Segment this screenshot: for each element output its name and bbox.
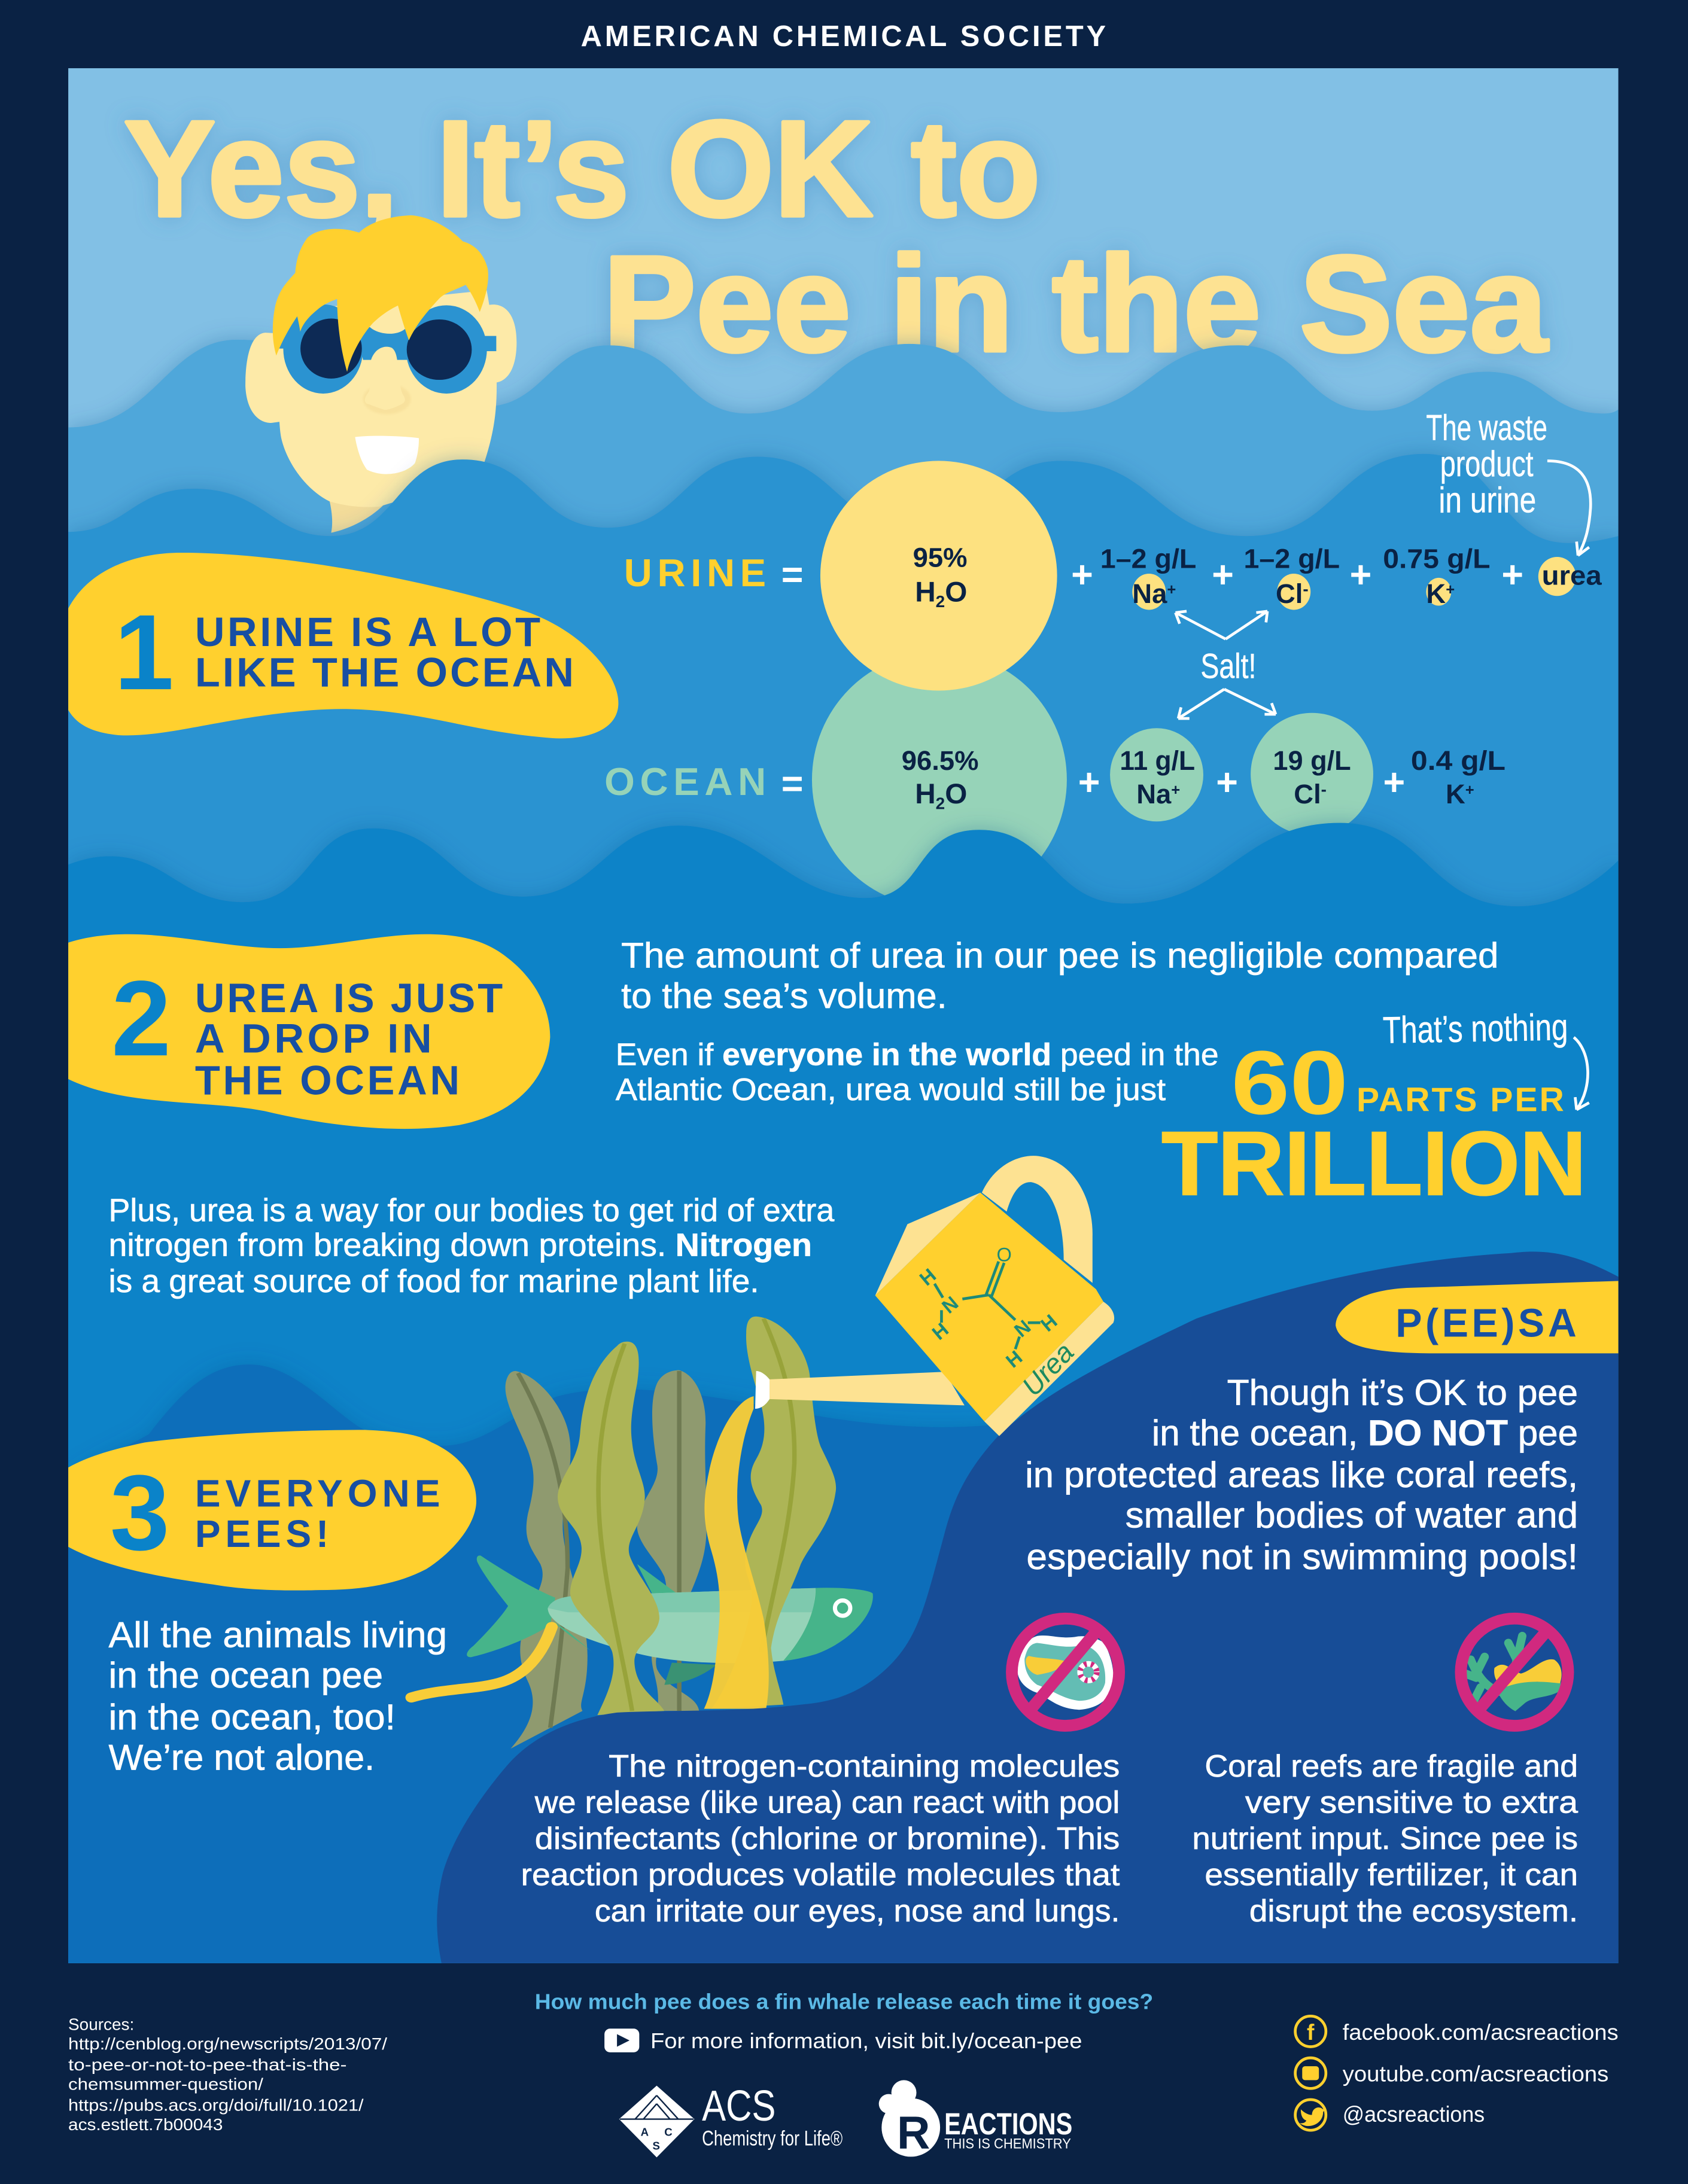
text: coral reefs: very sensitive to extra <box>1245 1785 1578 1820</box>
stat: 60 parts per trillion: 60 <box>1231 1032 1348 1134</box>
glasses <box>279 304 496 394</box>
logo: Reactions <box>879 2080 1072 2158</box>
annotation: the waste product in urine: product <box>1440 443 1534 484</box>
text: do not pee in protected areas: smaller bodies of water and <box>1126 1494 1578 1535</box>
urine composition text: 2 <box>936 592 945 611</box>
text: nitrogen food for marine life <box>109 1193 834 1299</box>
text: everyone in the world: Atlantic Ocean, urea would still be just <box>616 1073 1166 1107</box>
ocean composition text: 19 g/L <box>1273 745 1351 776</box>
panel: dark blue P(EE)SA area <box>437 1251 1619 1963</box>
text: pool chemistry: disinfectants (chlorine or bromine). This <box>535 1821 1120 1856</box>
heading 3: EVERYONE <box>195 1472 440 1515</box>
text: coral reefs: Coral reefs are fragile and <box>1205 1749 1578 1784</box>
youtube <box>1295 2058 1608 2088</box>
text: urea negligible <box>621 936 1498 1016</box>
text: pool chemistry: we release (like urea) can react with pool <box>534 1785 1120 1820</box>
numeral 2: 2 <box>111 958 171 1078</box>
urine composition text: 0.75 g/L <box>1383 544 1490 574</box>
annotation: the waste product in urine: in urine <box>1438 480 1536 520</box>
ocean composition text: O <box>945 778 967 810</box>
ocean composition text: Cl <box>1294 779 1321 809</box>
arrows to ocean ions <box>1178 689 1276 718</box>
facebook: f <box>1307 2019 1315 2045</box>
text: coral reefs: essentially fertilizer, it can <box>1205 1858 1578 1893</box>
tooth <box>355 436 419 474</box>
ACS diamond: S <box>652 2140 660 2152</box>
ocean composition text: H <box>915 778 936 810</box>
footer: sources: acs.estlett.7b00043 <box>68 2115 223 2134</box>
badge: P(EE)SA <box>1336 1281 1619 1353</box>
panel: main illustrated ocean panel <box>68 68 1619 1963</box>
urea molecule: H <box>1036 1310 1062 1336</box>
fish <box>467 1555 677 1657</box>
annotation: that's nothing: That’s nothing <box>1382 1006 1568 1052</box>
text: pool chemistry: The nitrogen-containing molecules <box>609 1749 1120 1784</box>
ion circles <box>1132 557 1576 610</box>
facebook <box>1295 2016 1619 2047</box>
wave: lower deep layer <box>68 823 1619 1963</box>
ACS diamond: C <box>664 2125 673 2138</box>
blob: section 3: PEES! <box>195 1512 329 1555</box>
ocean composition text: 11 g/L <box>1120 745 1195 776</box>
urine composition text: urea <box>1542 561 1602 591</box>
icon: no peeing in pools <box>1012 1619 1119 1726</box>
urea molecule: N <box>938 1292 962 1318</box>
text: all animals pee: We’re not alone. <box>109 1737 375 1777</box>
title: Yes, It’s OK to <box>124 93 1041 245</box>
face <box>278 290 497 507</box>
blob: section 2 <box>68 934 550 1129</box>
logo: ACS: ACS <box>702 2082 775 2130</box>
urea molecule: O <box>996 1244 1012 1266</box>
urine composition text: + <box>1167 581 1176 598</box>
urea molecule <box>916 1244 1062 1372</box>
annotation: salt with arrows: Salt! <box>1200 647 1256 686</box>
equation row: ocean <box>604 713 1373 836</box>
hair <box>273 215 488 372</box>
badge: P(EE)SA: P(EE)SA <box>1395 1301 1577 1345</box>
footer: more information: For more information, visit bit.ly/ocean-pee <box>650 2028 1082 2053</box>
blob: section 2: A DROP IN <box>195 1016 432 1062</box>
can label: Urea: Urea <box>1016 1336 1080 1402</box>
logo: Reactions: THIS IS CHEMISTRY <box>944 2136 1071 2152</box>
ocean plus signs: + <box>1078 761 1100 803</box>
footer: sources: Sources: <box>68 2015 134 2034</box>
text: do not pee in protected areas <box>1025 1372 1578 1577</box>
text: nitrogen food for marine life: Plus, urea is a way for our bodies to get rid of extra <box>109 1193 834 1228</box>
ocean composition text: + <box>1171 782 1180 799</box>
plus signs <box>1071 554 1523 596</box>
twitter <box>1295 2100 1485 2130</box>
equals: = <box>781 763 803 805</box>
urea molecule: N <box>1010 1316 1035 1341</box>
footer: sources: http://cenblog.org/newscripts/2013/07/ <box>68 2034 387 2053</box>
shape: ocean water circle (drawn behind lower wave) <box>812 651 1067 908</box>
text: pool chemistry: can irritate our eyes, nose and lungs. <box>595 1894 1120 1929</box>
title: Pee in the Sea <box>603 229 1549 380</box>
circle: chloride <box>1251 713 1373 836</box>
seaweed back blades <box>506 1371 588 1749</box>
footer: whale question: How much pee does a fin whale release each time it goes? <box>535 1990 1153 2014</box>
urine composition text: Na <box>1132 578 1167 609</box>
ocean plus signs: + <box>1216 761 1238 803</box>
title <box>124 114 1550 359</box>
text: everyone in the world <box>616 1038 1219 1107</box>
urine composition text: 95% <box>913 542 968 572</box>
text: urea negligible: to the sea’s volume. <box>621 976 947 1016</box>
seaweed front blades <box>558 1342 664 1715</box>
circle: sodium <box>1110 728 1203 821</box>
urine composition text: 1–2 g/L <box>1100 544 1196 574</box>
text: coral reefs: disrupt the ecosystem. <box>1249 1894 1578 1929</box>
Reactions molecule mark <box>879 2080 940 2158</box>
footer: sources: chemsummer-question/ <box>68 2075 263 2094</box>
footer: sources <box>68 2015 387 2134</box>
numeral 3: 3 <box>110 1453 170 1573</box>
plus signs: + <box>1212 554 1234 596</box>
annotation: salt with arrows <box>1175 611 1276 718</box>
text: all animals pee: All the animals living <box>109 1614 447 1655</box>
wave: middle layer <box>68 454 1619 1963</box>
text: everyone in the world: Even if everyone in the world peed in the <box>616 1038 1219 1073</box>
footer: sources: https://pubs.acs.org/doi/full/10.1021/ <box>68 2096 364 2115</box>
ocean plus signs: + <box>1383 761 1405 803</box>
lenses <box>300 319 362 379</box>
text: coral reefs: nutrient input. Since pee is <box>1192 1821 1578 1856</box>
plus signs: + <box>1350 554 1371 596</box>
footer: sources: to-pee-or-not-to-pee-that-is-the- <box>68 2055 347 2074</box>
label: urine: URINE <box>624 551 766 595</box>
urine composition text: Cl <box>1276 578 1303 609</box>
text: all animals pee: in the ocean pee <box>109 1655 383 1695</box>
logo: ACS <box>619 2082 843 2158</box>
illustration: watering can <box>755 1156 1114 1436</box>
ocean composition text: K <box>1446 779 1465 809</box>
text: pool chemistry <box>521 1749 1120 1929</box>
text: all animals pee: in the ocean, too! <box>109 1696 396 1737</box>
watering can body <box>875 1193 1103 1421</box>
heading 1: URINE IS A LOT <box>195 609 540 655</box>
ocean composition text: Na <box>1136 779 1171 809</box>
blob: section 1 <box>68 553 618 738</box>
wave: upper light layer <box>68 331 1619 865</box>
urine stream from can <box>704 1396 769 1709</box>
curved arrow to urea <box>1547 461 1590 556</box>
logo: ACS: Chemistry for Life® <box>702 2127 843 2151</box>
facebook: facebook.com/acsreactions <box>1343 2019 1619 2045</box>
equation row: urine <box>624 461 1602 690</box>
urine composition text <box>913 542 1602 611</box>
blob: section 1: LIKE THE OCEAN <box>195 649 574 695</box>
ACS diamond <box>619 2086 695 2158</box>
ocean composition text: - <box>1321 780 1327 799</box>
urea molecule: H <box>1002 1347 1026 1372</box>
watering can spout <box>770 1372 965 1405</box>
numeral 1: 1 <box>114 592 174 712</box>
fish eye <box>835 1601 850 1616</box>
stat: 60 parts per trillion: PARTS PER <box>1357 1080 1564 1119</box>
annotation: the waste product in urine <box>1426 407 1590 556</box>
equals: = <box>781 554 803 596</box>
urine composition text: H <box>915 577 936 608</box>
ocean composition text: 2 <box>936 794 945 812</box>
circle: 95% water <box>820 461 1057 690</box>
urine composition text: O <box>945 577 967 608</box>
text: do not pee in protected areas: in the ocean, DO NOT pee <box>1152 1412 1578 1453</box>
ocean plus signs <box>1078 761 1405 803</box>
illustration: seaweed, fish and stream <box>411 1317 873 1749</box>
urine composition text: K <box>1426 578 1446 609</box>
text: urea negligible: The amount of urea in our pee is negligible compared <box>621 936 1498 976</box>
heading 2: UREA IS JUST <box>195 975 503 1021</box>
ocean composition text: + <box>1465 782 1474 799</box>
plus signs: + <box>1071 554 1093 596</box>
ACS diamond: A <box>641 2125 649 2138</box>
ocean composition text: 96.5% <box>902 745 978 776</box>
stat: 60 parts per trillion <box>1161 1032 1586 1214</box>
watering can handle <box>982 1156 1093 1283</box>
fish pee stream <box>411 1627 552 1698</box>
text: pool chemistry: reaction produces volatile molecules that <box>521 1858 1120 1893</box>
text: do not pee in protected areas: in protected areas like coral reefs, <box>1025 1454 1578 1495</box>
arrow <box>1574 1037 1589 1110</box>
ocean composition text: 0.4 g/L <box>1411 745 1505 776</box>
neck <box>329 499 383 533</box>
text: coral reefs <box>1192 1749 1578 1929</box>
ocean composition text <box>902 745 1505 812</box>
logo: Reactions: EACTIONS <box>944 2107 1072 2141</box>
text: do not pee in protected areas: especially not in swimming pools! <box>1026 1536 1578 1577</box>
nose shadow <box>363 384 411 414</box>
urea molecule: H <box>928 1318 953 1344</box>
blob: section 2: THE OCEAN <box>195 1057 460 1103</box>
urea molecule: H <box>916 1265 940 1290</box>
ears <box>245 304 516 423</box>
urine composition text: - <box>1303 580 1309 598</box>
text: all animals pee <box>109 1614 447 1777</box>
stat: 60 parts per trillion: TRILLION <box>1161 1113 1586 1214</box>
Reactions molecule mark: R <box>897 2107 930 2158</box>
annotation: that's nothing <box>1382 1006 1589 1110</box>
arrows to urine ions <box>1175 611 1267 639</box>
urine composition text: + <box>1446 581 1455 598</box>
footer: social media links <box>1295 2016 1619 2130</box>
header: American Chemical Society: AMERICAN CHEMICAL SOCIETY <box>581 20 1106 53</box>
text: nitrogen food for marine life: nitrogen from breaking down proteins. Nitrogen <box>109 1227 812 1263</box>
text: do not pee in protected areas: Though it’s OK to pee <box>1227 1372 1578 1413</box>
blob: section 3 <box>68 1430 476 1591</box>
nose <box>365 347 405 410</box>
hill: deep background wave <box>68 1364 1619 1963</box>
illustration: swimmer head with sunglasses <box>245 215 516 533</box>
text: nitrogen food for marine life: is a great source of food for marine plant life. <box>109 1264 759 1299</box>
twitter: @acsreactions <box>1343 2101 1485 2127</box>
icon: no peeing on coral <box>1461 1619 1568 1726</box>
annotation: the waste product in urine: The waste <box>1426 407 1547 448</box>
youtube: youtube.com/acsreactions <box>1343 2061 1608 2086</box>
icon: video play <box>604 2028 639 2052</box>
urine composition text: 1–2 g/L <box>1244 544 1340 574</box>
label: ocean: OCEAN <box>604 760 766 803</box>
plus signs: + <box>1501 554 1523 596</box>
